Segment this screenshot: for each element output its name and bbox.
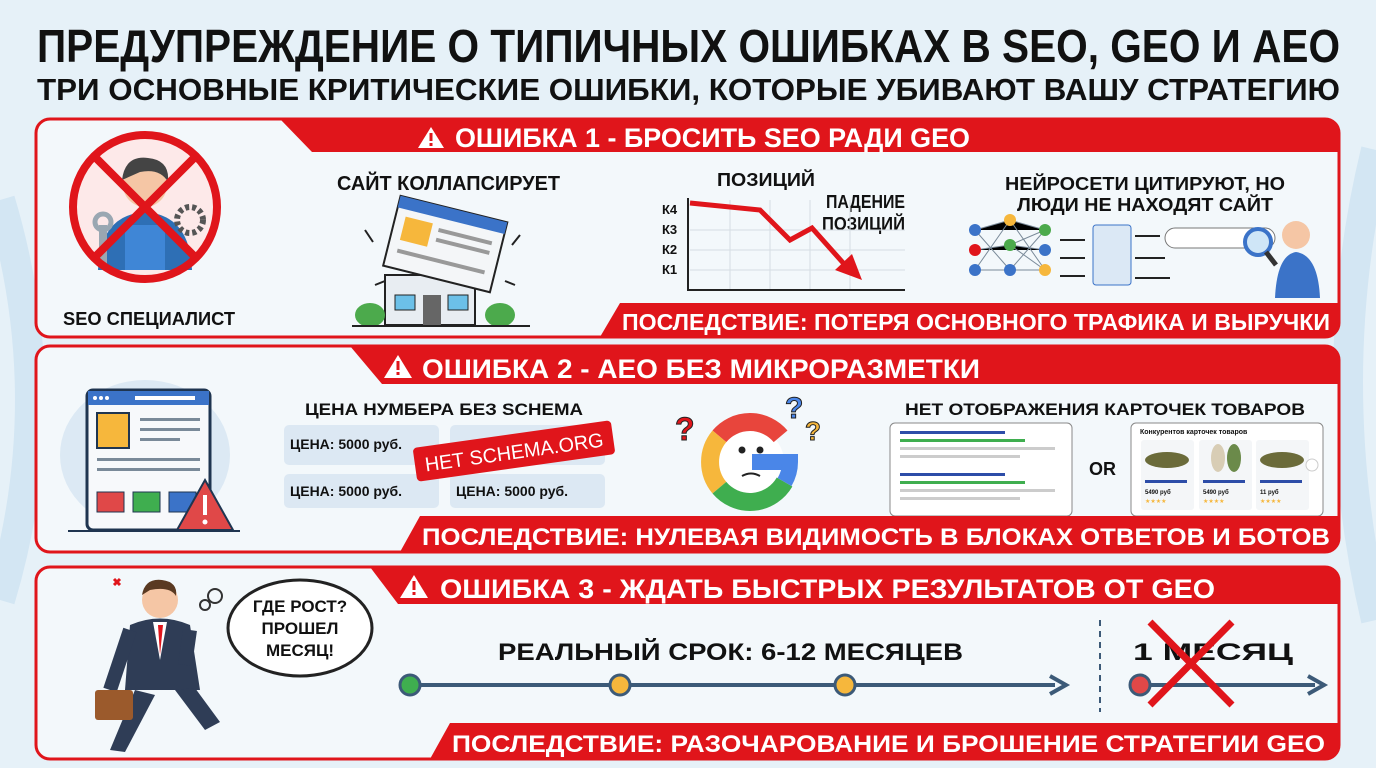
text: networks cite: ЛЮДИ НЕ НАХОДЯТ САЙТ [1017, 194, 1273, 215]
header: mistake 3: ОШИБКА 3 - ЖДАТЬ БЫСТРЫХ РЕЗУЛЬТАТОВ ОТ GEO [440, 574, 1215, 604]
text: networks cite: НЕЙРОСЕТИ ЦИТИРУЮТ, НО [1005, 173, 1285, 194]
price boxes: ЦЕНА: 5000 руб. [290, 436, 402, 452]
product cards box: 5490 руб [1203, 489, 1229, 496]
icon: confused Google [675, 392, 821, 502]
heading: price without schema: ЦЕНА НУМБЕРА БЕЗ SCHEMA [305, 400, 583, 419]
product cards box [1131, 423, 1323, 516]
tag: no schema.org [413, 420, 615, 482]
chart: position drop: ПАДЕНИЕ [826, 192, 905, 212]
timeline: 1 month crossed: 1 МЕСЯЦ [1133, 639, 1294, 666]
icon: confused Google: ? [675, 411, 695, 447]
price boxes: ЦЕНА: 5000 руб. [290, 483, 402, 499]
chart: position drop: К2 [662, 242, 677, 257]
speech bubble: ГДЕ РОСТ? [253, 597, 347, 616]
chart: position drop: К3 [662, 222, 677, 237]
chart: position drop: К4 [662, 202, 678, 217]
price boxes: ЦЕНА: 5000 руб. [456, 483, 568, 499]
chart: position drop: ПОЗИЦИЙ [717, 169, 815, 190]
product cards box: ★★★★ [1260, 498, 1282, 505]
icon: banned SEO specialist [73, 135, 217, 279]
icon: angry businessman [95, 579, 222, 752]
panel: mistake 1 [36, 119, 1339, 337]
text: networks cite [1005, 173, 1285, 215]
price boxes [284, 425, 605, 508]
header: mistake 1 [280, 119, 1339, 153]
heading: no product cards: НЕТ ОТОБРАЖЕНИЯ КАРТОЧЕК ТОВАРОВ [905, 400, 1305, 419]
text: OR: OR [1089, 459, 1116, 479]
speech bubble: МЕСЯЦ! [266, 641, 334, 660]
timeline: real term [400, 638, 1066, 695]
consequence 1: ПОСЛЕДСТВИЕ: ПОТЕРЯ ОСНОВНОГО ТРАФИКА И ВЫРУЧКИ [622, 309, 1330, 335]
header: mistake 3 [370, 567, 1339, 604]
icon: collapsing site [352, 196, 530, 327]
header: mistake 2: ОШИБКА 2 - АЕО БЕЗ МИКРОРАЗМЕТКИ [422, 354, 980, 384]
icon: broken webpage [60, 380, 240, 531]
consequence 3: ПОСЛЕДСТВИЕ: РАЗОЧАРОВАНИЕ И БРОШЕНИЕ СТРАТЕГИИ GEO [452, 731, 1325, 758]
panel: mistake 2 [36, 346, 1339, 552]
speech bubble [228, 580, 372, 676]
header: mistake 2 [350, 346, 1339, 384]
icon: confused Google: ? [805, 416, 821, 446]
timeline: real term: РЕАЛЬНЫЙ СРОК: 6-12 МЕСЯЦЕВ [498, 638, 963, 666]
tag: no schema.org: НЕТ SCHEMA.ORG [424, 430, 605, 476]
chart: position drop: К1 [662, 262, 677, 277]
chart: position drop [662, 169, 905, 290]
snippet box [890, 423, 1072, 516]
icon: confused Google: ? [785, 392, 803, 425]
chart: position drop: ПОЗИЦИЙ [822, 213, 905, 234]
product cards box: ★★★★ [1203, 498, 1225, 505]
icon: neural network to search [969, 214, 1320, 298]
speech bubble: ПРОШЕЛ [262, 619, 338, 638]
product cards box: ★★★★ [1145, 498, 1167, 505]
panel: mistake 3 [36, 567, 1339, 759]
consequence 2 [400, 516, 1339, 552]
product cards box: 5490 руб [1145, 489, 1171, 496]
product cards box: 11 руб [1260, 489, 1279, 496]
product cards box: Конкурентов карточек товаров [1140, 429, 1248, 436]
consequence 2: ПОСЛЕДСТВИЕ: НУЛЕВАЯ ВИДИМОСТЬ В БЛОКАХ ОТВЕТОВ И БОТОВ [422, 524, 1330, 551]
timeline: 1 month crossed [1130, 622, 1324, 705]
label: SEO specialist: SEO СПЕЦИАЛИСТ [63, 309, 235, 329]
header: mistake 1: ОШИБКА 1 - БРОСИТЬ SEO РАДИ GEO [455, 123, 970, 153]
subtitle: ТРИ ОСНОВНЫЕ КРИТИЧЕСКИЕ ОШИБКИ, КОТОРЫЕ УБИВАЮТ ВАШУ СТРАТЕГИЮ [37, 72, 1340, 107]
consequence 3 [430, 723, 1339, 759]
heading: site collapses: САЙТ КОЛЛАПСИРУЕТ [337, 171, 560, 195]
